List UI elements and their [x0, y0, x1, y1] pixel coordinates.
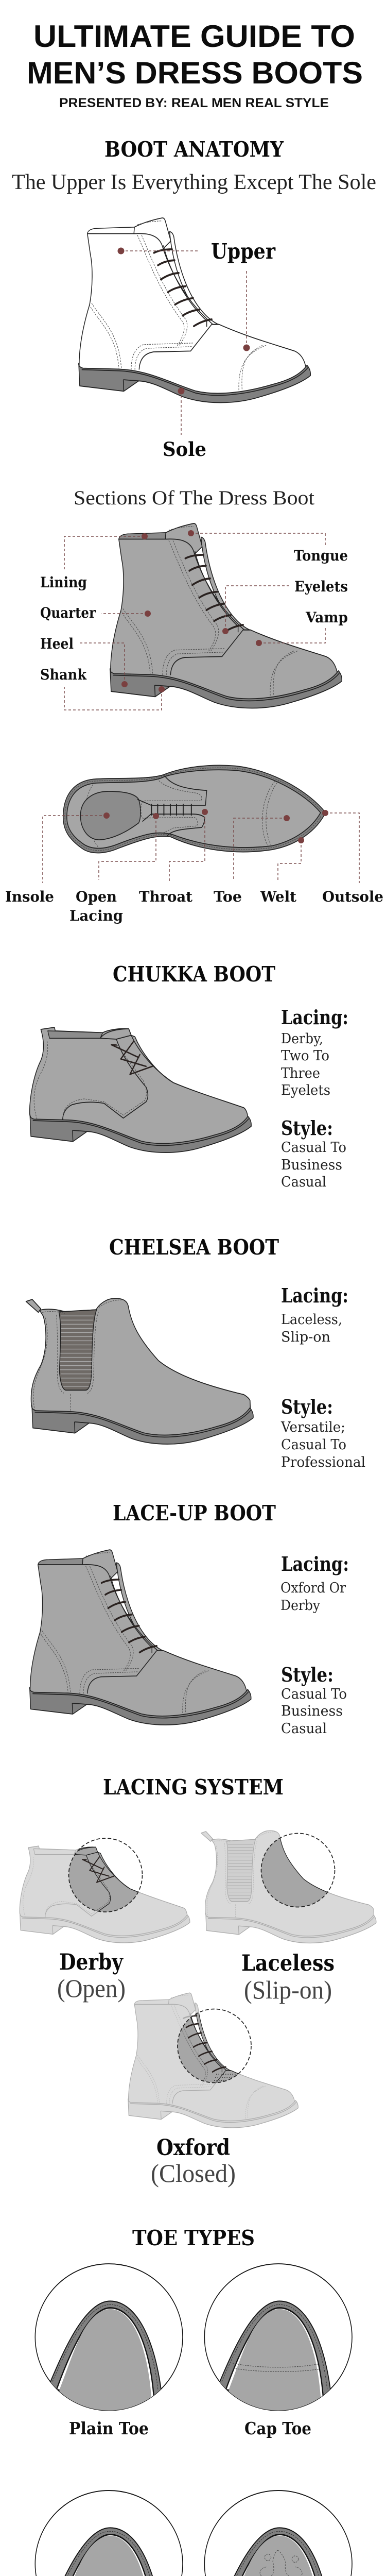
callout: outsole — [322, 810, 383, 905]
heading: boot anatomy: BOOT ANATOMY — [104, 137, 284, 162]
callout: eyelets: Eyelets — [294, 578, 348, 595]
callout: tongue: Tongue — [294, 547, 348, 564]
callout: open lacing — [69, 813, 159, 924]
label: laceless — [241, 1951, 335, 2004]
panel: cap toe — [204, 2264, 352, 2438]
text: lace-up lacing: Derby — [280, 1598, 321, 1614]
panel: derby lacing — [20, 1838, 190, 2003]
text: chelsea lacing: Laceless, — [281, 1312, 342, 1328]
callout: lining — [40, 533, 148, 591]
callout: quarter — [40, 604, 151, 621]
text: chelsea style: Style: — [281, 1395, 333, 1418]
illustration: chukka boot — [30, 1027, 251, 1153]
text: upper definition: The Upper Is Everything Except The Sole — [12, 171, 376, 194]
illustration: lace-up boot — [30, 1550, 251, 1725]
illustration: white lace-up boot — [79, 218, 310, 403]
label: laceless: Laceless — [241, 1951, 335, 1976]
callout: open lacing: Open — [76, 888, 117, 905]
panel: wingtip toe — [35, 2490, 183, 2576]
illustration: laceless detail — [261, 1838, 327, 1907]
callout: shank: Shank — [40, 666, 87, 683]
label: laceless: (Slip-on) — [244, 1975, 332, 2004]
callout: quarter: Quarter — [40, 604, 96, 621]
panel: top view boot sections — [5, 765, 383, 924]
heading: toe types: TOE TYPES — [132, 2226, 255, 2250]
illustration: boot top view — [63, 765, 326, 853]
text: lace-up style: Casual To — [281, 1686, 347, 1702]
text: chukka lacing: Eyelets — [281, 1082, 330, 1098]
callout: upper — [117, 239, 276, 351]
callout: insole: Insole — [5, 888, 54, 905]
panel: oxford — [128, 1993, 298, 2188]
illustration: faded chelsea boot — [201, 1831, 376, 1943]
illustration: oxford lacing detail — [178, 2012, 238, 2082]
label: derby: (Open) — [57, 1974, 126, 2003]
label: oxford: (Closed) — [151, 2159, 236, 2188]
illustration: wingtip toe — [35, 2490, 183, 2576]
title: MEN’S DRESS BOOTS — [27, 56, 363, 90]
callout: vamp — [256, 609, 348, 646]
heading: chukka boot: CHUKKA BOOT — [113, 962, 275, 987]
callout: open lacing: Lacing — [69, 907, 123, 924]
text: chukka lacing — [281, 1006, 348, 1098]
label: derby: Derby — [59, 1950, 124, 1975]
subtitle: presented by: PRESENTED BY: REAL MEN REAL STYLE — [59, 96, 329, 110]
panel: white boot anatomy diagram — [79, 218, 310, 461]
label: derby — [57, 1950, 126, 2003]
illustration: chelsea boot — [26, 1298, 253, 1444]
text: lace-up style: Style: — [281, 1663, 334, 1686]
text: chelsea lacing: Lacing: — [281, 1284, 348, 1307]
label: oxford: Oxford — [156, 2135, 230, 2161]
text: chelsea style: Versatile; — [280, 1419, 345, 1435]
callout: shank — [40, 666, 165, 710]
callout: sole — [163, 387, 206, 461]
callout: heel: Heel — [40, 635, 74, 652]
panel: plain toe — [35, 2264, 183, 2438]
illustration: plain toe — [35, 2264, 183, 2413]
heading: lace-up boot: LACE-UP BOOT — [113, 1501, 276, 1526]
label: plain toe: Plain Toe — [69, 2418, 149, 2438]
text: chelsea lacing — [281, 1284, 348, 1345]
callout: insole — [5, 812, 110, 905]
callout: lining: Lining — [40, 574, 87, 591]
text: chukka lacing: Lacing: — [281, 1006, 348, 1029]
text: chelsea style — [280, 1395, 365, 1470]
text: chukka style: Casual — [281, 1174, 326, 1190]
text: chelsea lacing: Slip-on — [281, 1329, 330, 1345]
callout: tongue — [188, 530, 348, 564]
title: ULTIMATE GUIDE TO — [33, 19, 355, 54]
heading: chelsea boot: CHELSEA BOOT — [109, 1235, 279, 1260]
callout: eyelets — [222, 578, 348, 634]
heading: lacing system: LACING SYSTEM — [103, 1775, 284, 1800]
text: lace-up lacing — [280, 1552, 349, 1614]
callout: welt: Welt — [260, 888, 296, 905]
text: lace-up style — [281, 1663, 347, 1737]
text: lace-up lacing: Lacing: — [281, 1552, 349, 1575]
callout: upper: Upper — [211, 239, 276, 264]
panel: laceless — [201, 1831, 376, 2004]
text: lace-up style: Business — [281, 1703, 343, 1719]
text: chukka style — [281, 1116, 346, 1190]
text: chukka style: Casual To — [281, 1140, 346, 1156]
text: chelsea style: Casual To — [281, 1437, 346, 1453]
callout: vamp: Vamp — [305, 609, 348, 626]
illustration: derby lacing detail — [69, 1846, 138, 1912]
text: chukka style: Style: — [281, 1116, 333, 1140]
callout: throat: Throat — [139, 888, 192, 905]
illustration: faded oxford boot — [128, 1993, 298, 2128]
panel: wingtip medallion — [204, 2490, 352, 2576]
illustration: grey lace-up boot — [110, 523, 342, 708]
text: chukka lacing: Three — [281, 1065, 320, 1081]
callout: toe — [214, 815, 290, 905]
label: oxford — [151, 2135, 236, 2188]
panel: side view boot sections — [40, 523, 348, 710]
callout: welt — [260, 837, 304, 905]
text: chukka lacing: Two To — [281, 1048, 329, 1064]
callout: toe: Toe — [214, 888, 242, 905]
illustration: faded derby boot — [20, 1846, 190, 1943]
callout: sole: Sole — [163, 438, 206, 461]
text: lace-up lacing: Oxford Or — [280, 1580, 346, 1596]
heading: sections of the dress boot: Sections Of The Dress Boot — [74, 487, 314, 509]
text: chelsea style: Professional — [281, 1454, 365, 1470]
label: cap toe: Cap Toe — [244, 2418, 311, 2438]
callout: outsole: Outsole — [322, 888, 383, 905]
illustration: wingtip medallion toe — [204, 2490, 352, 2576]
text: chukka style: Business — [281, 1157, 342, 1173]
text: chukka lacing: Derby, — [281, 1031, 323, 1047]
title — [27, 19, 363, 90]
illustration: cap toe — [204, 2264, 352, 2413]
callout: throat — [139, 809, 208, 905]
text: lace-up style: Casual — [281, 1721, 327, 1737]
callout: heel — [40, 635, 128, 687]
